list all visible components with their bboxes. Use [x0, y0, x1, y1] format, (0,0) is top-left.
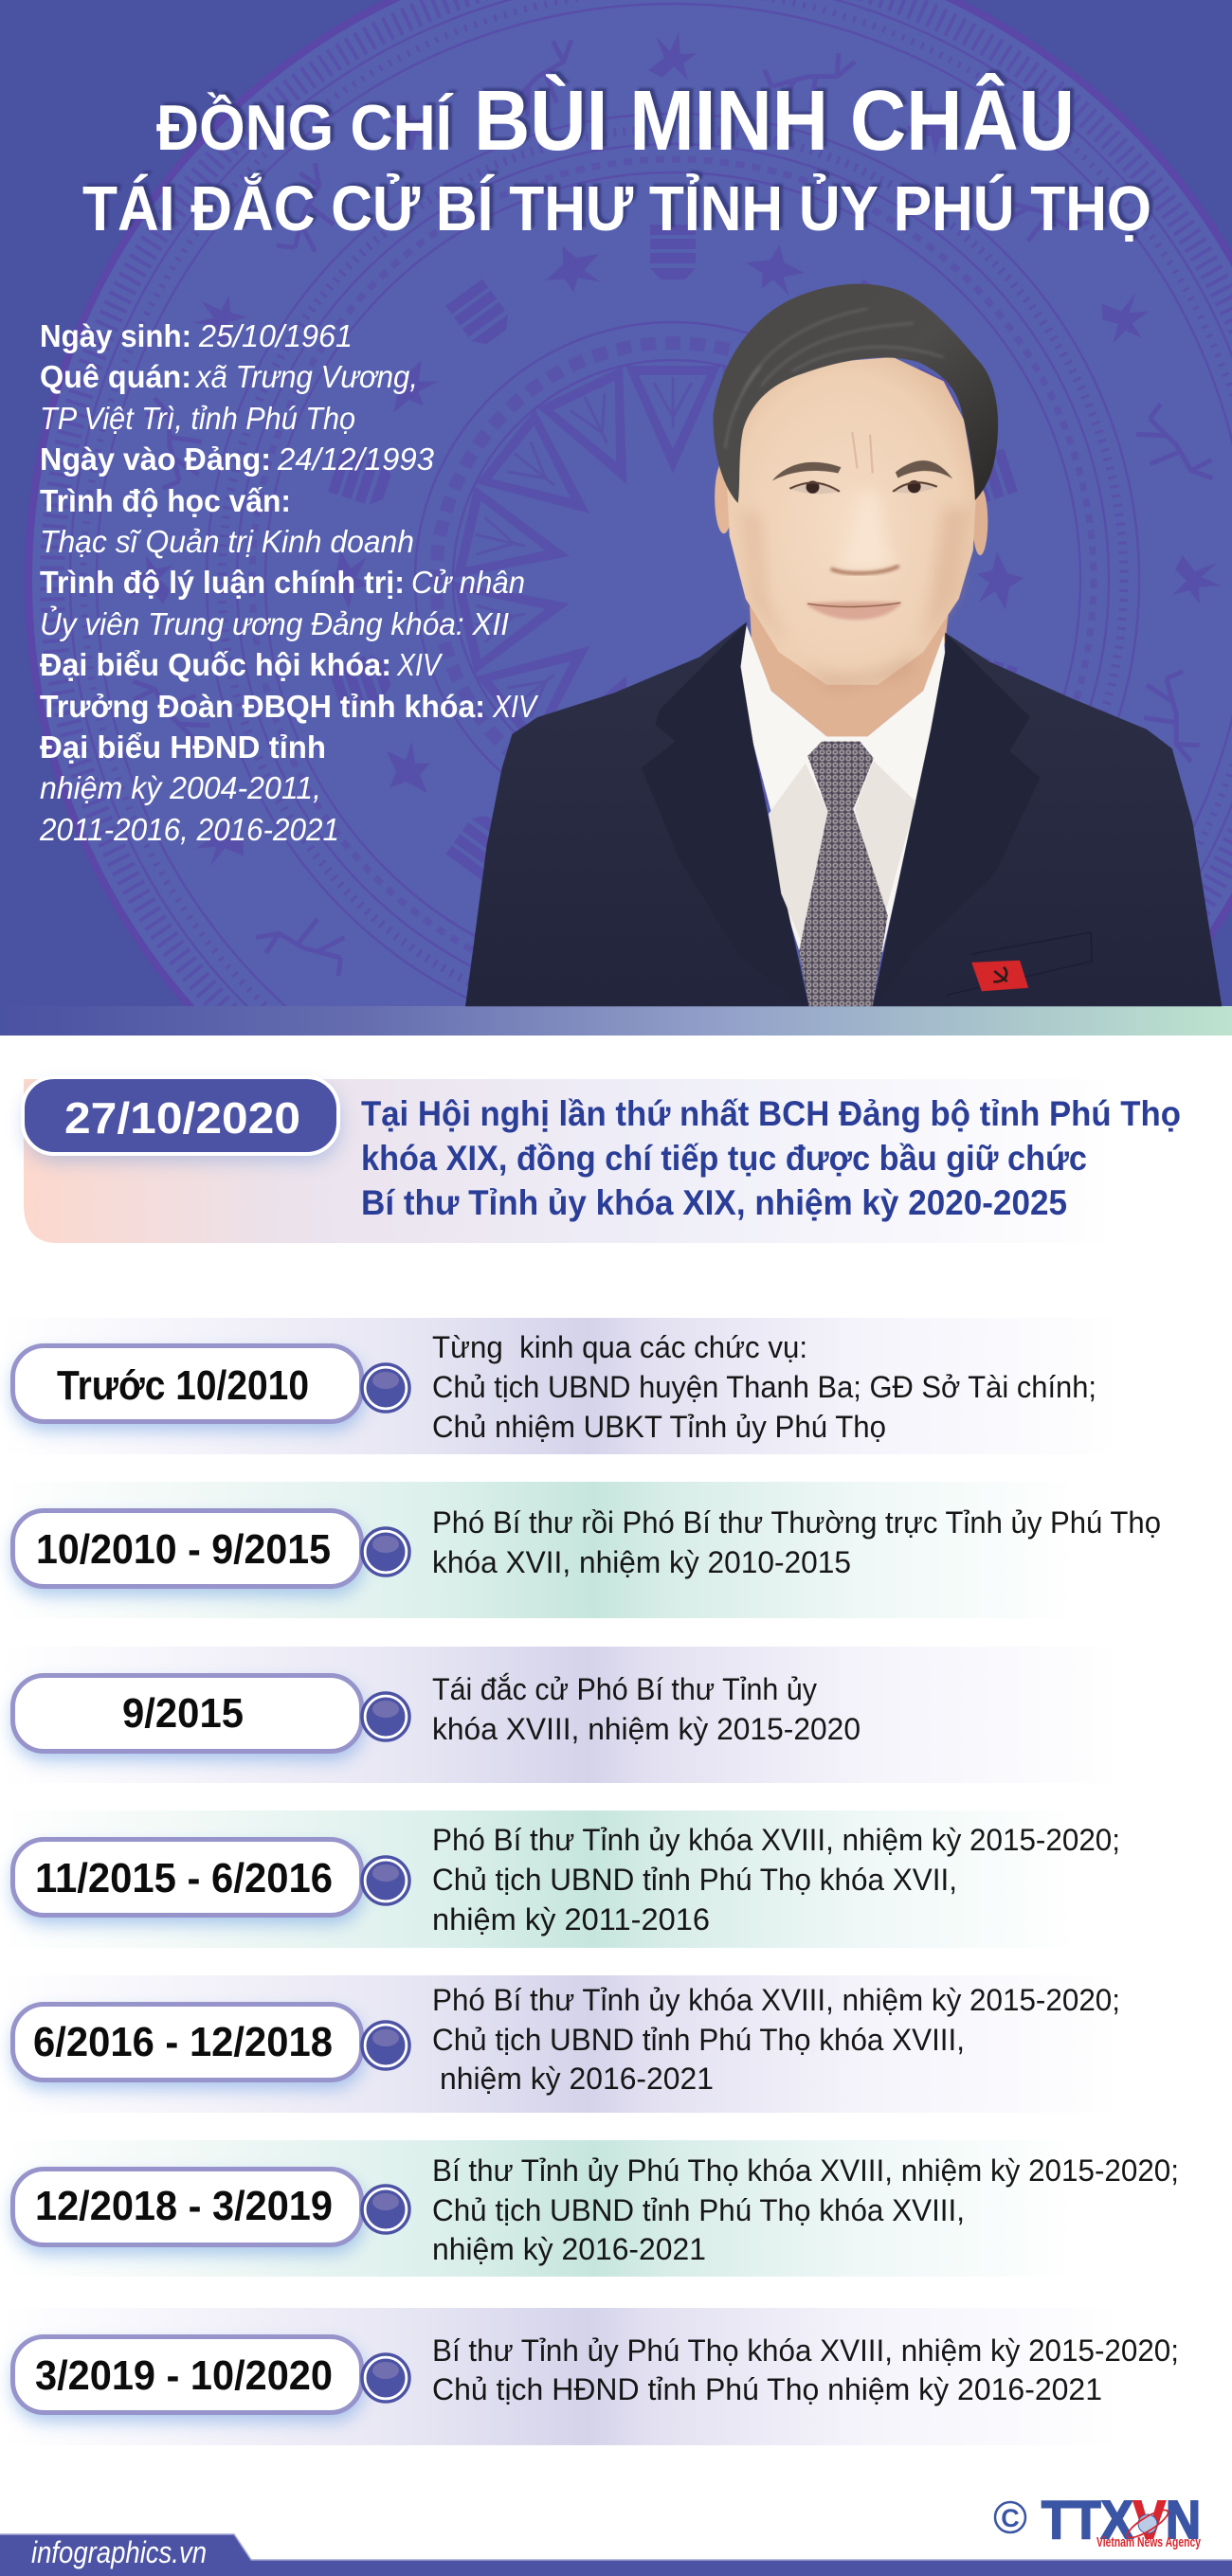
footer bar: [0, 2534, 1232, 2576]
copyright mark: [995, 2502, 1025, 2532]
description: Phó Bí thư rồi Phó Bí thư Thường trực Tỉnh ủy Phú Thọ: [432, 1505, 1161, 1540]
nose: [831, 493, 899, 573]
date pill: [13, 2336, 364, 2422]
biography text: Trưởng Đoàn ĐBQH tỉnh khóa:: [40, 689, 485, 724]
date pill: 9/2015: [122, 1690, 244, 1737]
description: Chủ tịch UBND huyện Thanh Ba; GĐ Sở Tài chính;: [432, 1370, 1096, 1404]
description: [432, 1983, 1120, 2096]
description: Chủ nhiệm UBKT Tỉnh ủy Phú Thọ: [432, 1410, 886, 1444]
suit: [465, 622, 1222, 1006]
description: nhiệm kỳ 2011-2016: [432, 1902, 710, 1937]
face: [726, 357, 976, 685]
description: Chủ tịch UBND tỉnh Phú Thọ khóa XVII,: [432, 1863, 957, 1897]
wordmark: TTXVN: [1042, 2490, 1201, 2550]
date pill: [13, 2005, 364, 2089]
date pill: [13, 1345, 364, 1431]
highlight text: [361, 1094, 1181, 1222]
biography text: XIV: [492, 689, 539, 724]
description: [432, 2333, 1179, 2406]
biography text: Trình độ học vấn:: [40, 483, 291, 518]
description: [432, 1672, 861, 1746]
date pill: 10/2010 - 9/2015: [36, 1526, 331, 1573]
description: Tái đắc cử Phó Bí thư Tỉnh ủy: [432, 1672, 817, 1706]
date pill: [13, 1840, 364, 1924]
gradient band under hero: [0, 1006, 1232, 1036]
description: Phó Bí thư Tỉnh ủy khóa XVIII, nhiệm kỳ 2015-2020;: [432, 1983, 1120, 2017]
biography text: Ủy viên Trung ương Đảng khóa: XII: [40, 605, 509, 641]
timeline row 5: [0, 1975, 1120, 2113]
description: nhiệm kỳ 2016-2021: [432, 2232, 706, 2266]
lapels: [642, 622, 806, 1006]
timeline row 1: [0, 1318, 1111, 1454]
timeline row 6: [0, 2140, 1179, 2277]
timeline dot: [362, 2354, 409, 2402]
description: [432, 1505, 1161, 1579]
date pill: [13, 1510, 364, 1595]
date pill: [13, 2170, 364, 2254]
biography text: xã Trưng Vương,: [194, 359, 418, 394]
collar shading: [769, 761, 915, 942]
date pill: [23, 1077, 341, 1162]
date pill: 6/2016 - 12/2018: [33, 2019, 333, 2065]
biography text: Cử nhân: [411, 565, 525, 600]
biography text: Trình độ lý luận chính trị:: [40, 565, 405, 600]
timeline row 3: [0, 1647, 1111, 1783]
brows: [772, 462, 841, 481]
date pill: [13, 1675, 364, 1760]
hair: [713, 284, 998, 503]
date pill: 11/2015 - 6/2016: [35, 1855, 333, 1901]
hair highlights: [725, 309, 944, 449]
timeline row 2: [0, 1482, 1161, 1618]
biography text: Ngày sinh:: [40, 318, 191, 353]
source label: infographics.vn: [31, 2535, 207, 2569]
timeline row 7: [0, 2308, 1179, 2445]
date pill: Trước 10/2010: [57, 1362, 309, 1409]
biography text: nhiệm kỳ 2004-2011,: [40, 770, 321, 805]
description: Phó Bí thư Tỉnh ủy khóa XVIII, nhiệm kỳ 2015-2020;: [432, 1823, 1120, 1857]
biography text: XIV: [396, 647, 444, 682]
hero background: [0, 0, 1232, 1006]
timeline dot: [362, 2022, 409, 2069]
description: khóa XVII, nhiệm kỳ 2010-2015: [432, 1545, 851, 1579]
biography text: 24/12/1993: [277, 441, 435, 477]
biography text: Đại biểu HĐND tỉnh: [40, 730, 326, 765]
highlight text: khóa XIX, đồng chí tiếp tục được bầu giữ chức: [361, 1139, 1087, 1178]
facial shading: [740, 507, 969, 691]
timeline dot: [362, 1364, 409, 1412]
party pin: [971, 961, 1028, 991]
portrait: [465, 284, 1222, 1006]
tie: [799, 742, 888, 1006]
highlight box: [23, 1077, 1181, 1243]
description: [432, 1330, 1096, 1444]
biography text: Quê quán:: [40, 359, 191, 394]
highlight text: Bí thư Tỉnh ủy khóa XIX, nhiệm kỳ 2020-2025: [361, 1183, 1067, 1222]
timeline dot: [362, 1528, 409, 1576]
description: Chủ tịch UBND tỉnh Phú Thọ khóa XVIII,: [432, 2023, 965, 2057]
globe: [1124, 2506, 1171, 2542]
timeline dot: [362, 2186, 409, 2233]
description: [432, 2153, 1179, 2266]
biography text: TP Việt Trì, tỉnh Phú Thọ: [40, 401, 355, 436]
biography text: Thạc sĩ Quản trị Kinh doanh: [40, 524, 414, 559]
mouth: [806, 602, 902, 620]
title: [82, 72, 1151, 244]
title: BÙI MINH CHÂU: [474, 72, 1075, 169]
box background: [24, 1079, 1104, 1243]
ears: [715, 461, 733, 533]
title: TÁI ĐẮC CỬ BÍ THƯ TỈNH ỦY PHÚ THỌ: [82, 173, 1151, 244]
description: khóa XVIII, nhiệm kỳ 2015-2020: [432, 1712, 861, 1746]
description: nhiệm kỳ 2016-2021: [440, 2062, 714, 2096]
logo TTXVN: [995, 2490, 1201, 2550]
biography text: 25/10/1961: [198, 318, 353, 353]
timeline dot: [362, 1857, 409, 1904]
description: [432, 1823, 1120, 1937]
shirt: [739, 625, 945, 966]
bronze drum pattern: [25, 0, 1232, 1006]
biography text: Đại biểu Quốc hội khóa:: [40, 647, 391, 682]
copyright mark: C: [1001, 2504, 1020, 2532]
timeline dot: [362, 1693, 409, 1740]
forehead crease: [852, 432, 873, 473]
description: Bí thư Tỉnh ủy Phú Thọ khóa XVIII, nhiệm kỳ 2015-2020;: [432, 2153, 1179, 2188]
date pill: 27/10/2020: [64, 1093, 300, 1143]
timeline row 4: [0, 1810, 1120, 1948]
breast pocket: [946, 932, 1092, 995]
description: Bí thư Tỉnh ủy Phú Thọ khóa XVIII, nhiệm kỳ 2015-2020;: [432, 2333, 1179, 2368]
biography text: 2011-2016, 2016-2021: [39, 812, 339, 847]
highlight text: Tại Hội nghị lần thứ nhất BCH Đảng bộ tỉnh Phú Thọ: [361, 1094, 1181, 1133]
eyes: [789, 480, 937, 494]
date pill: 12/2018 - 3/2019: [35, 2183, 333, 2229]
biography text: Ngày vào Đảng:: [40, 441, 271, 477]
date pill: 3/2019 - 10/2020: [35, 2352, 333, 2399]
description: Chủ tịch HĐND tỉnh Phú Thọ nhiệm kỳ 2016-2021: [432, 2372, 1102, 2406]
neck: [748, 565, 953, 736]
description: Từng kinh qua các chức vụ:: [432, 1330, 807, 1364]
description: Chủ tịch UBND tỉnh Phú Thọ khóa XVIII,: [432, 2193, 965, 2227]
title: ĐỒNG CHÍ: [156, 91, 454, 164]
biography text: [39, 318, 539, 847]
